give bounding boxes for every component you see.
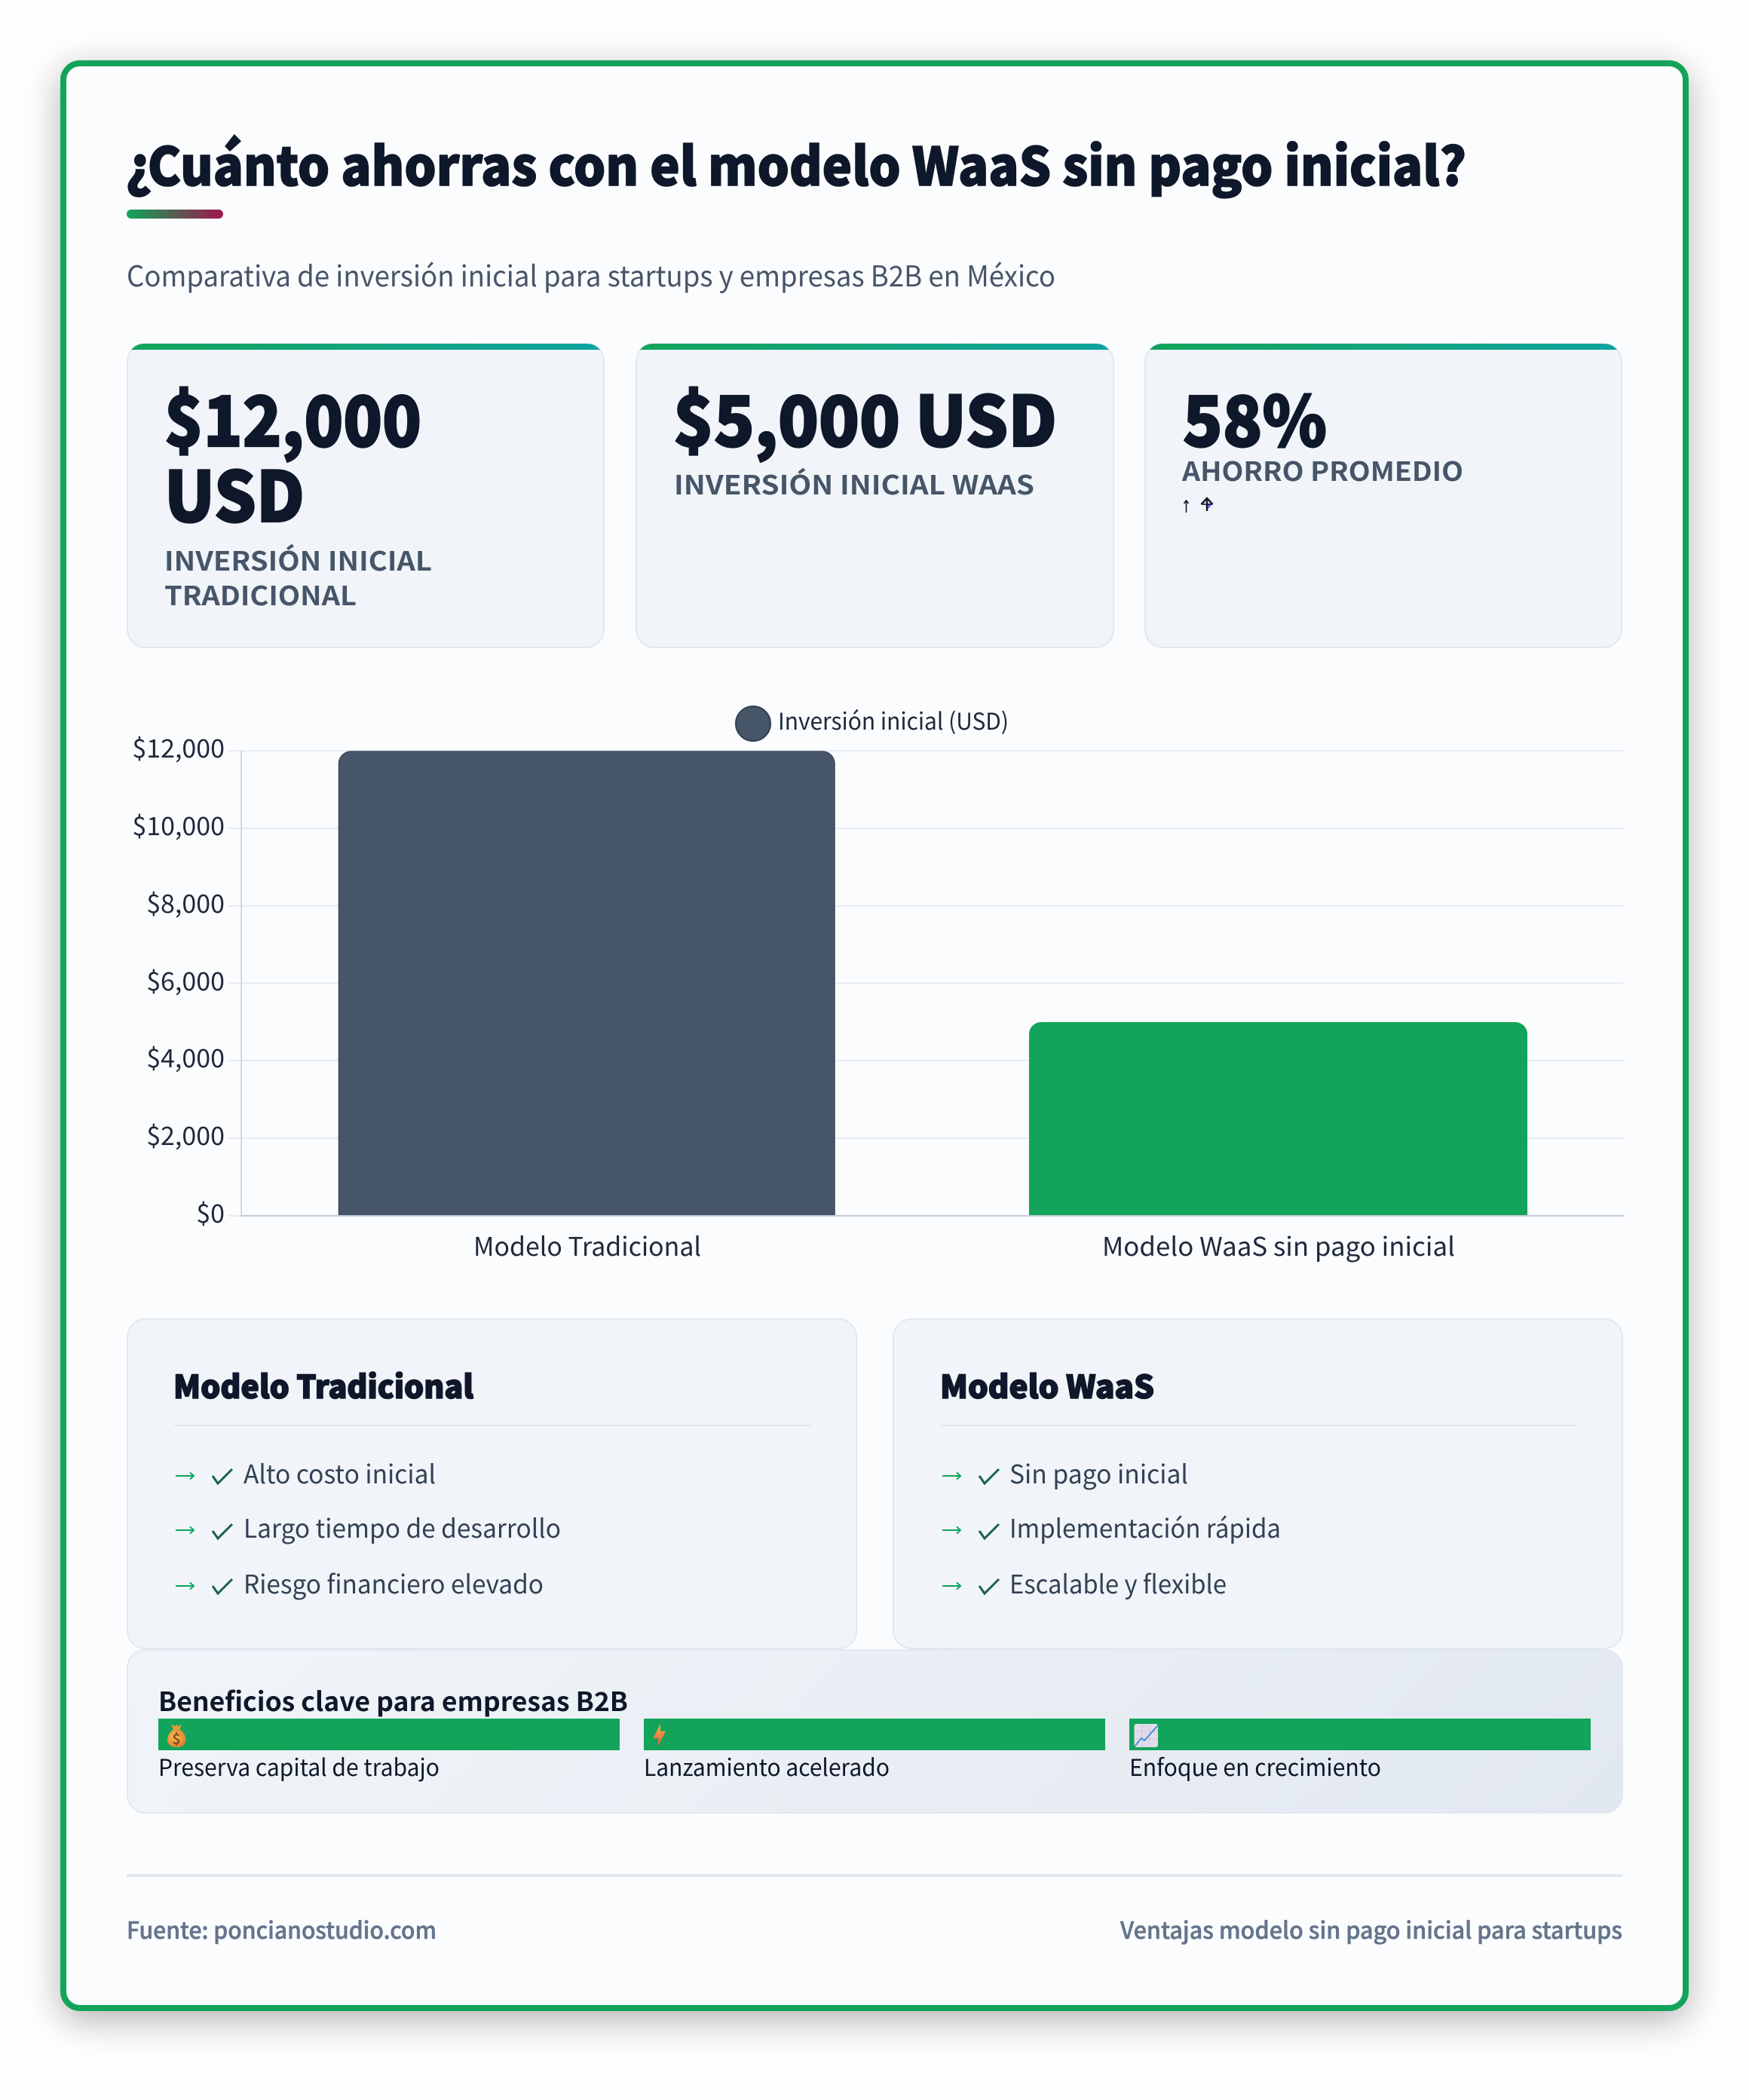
y axis labels: $10,000 bbox=[132, 806, 225, 843]
stat card: average savings: 58% bbox=[1183, 366, 1327, 467]
icon: up arrow bbox=[1184, 501, 1188, 513]
panel: key benefits bbox=[127, 1650, 1622, 1813]
subtitle: Comparativa de inversión inicial para startups y empresas B2B en México bbox=[127, 253, 1055, 295]
list item: Riesgo financiero elevado bbox=[244, 1564, 544, 1601]
benefit: accelerated launch: Lanzamiento acelerado bbox=[644, 1749, 890, 1783]
stat card: traditional investment: USD bbox=[164, 442, 305, 542]
stat card: traditional investment bbox=[127, 344, 604, 647]
icon: diamond up arrow bbox=[1202, 498, 1213, 511]
stat card: average savings: AHORRO PROMEDIO bbox=[1181, 451, 1463, 489]
benefit: growth focus: Enfoque en crecimiento bbox=[1129, 1749, 1381, 1783]
stat card: WaaS investment bbox=[636, 344, 1113, 647]
icon: money bag: $ bbox=[172, 1728, 181, 1749]
stat card: WaaS investment: $5,000 USD bbox=[673, 366, 1057, 467]
benefits heading: Beneficios clave para empresas B2B bbox=[158, 1681, 628, 1719]
x axis labels bbox=[473, 1226, 1455, 1263]
stat card: traditional investment: INVERSIÓN INICIAL bbox=[164, 540, 432, 579]
bar chart: initial investment bbox=[132, 703, 1624, 1263]
list item: Alto costo inicial bbox=[244, 1454, 436, 1491]
title underline bbox=[127, 210, 223, 219]
bar: traditional model bbox=[339, 752, 835, 1215]
stat card: traditional investment: TRADICIONAL bbox=[164, 575, 357, 614]
x axis labels: Modelo Tradicional bbox=[473, 1226, 701, 1263]
panel heading: Modelo WaaS bbox=[940, 1362, 1154, 1408]
y axis labels: $0 bbox=[196, 1193, 225, 1230]
y axis labels: $8,000 bbox=[146, 883, 225, 920]
benefit: growth focus bbox=[1129, 1719, 1591, 1783]
list item: Sin pago inicial bbox=[1009, 1454, 1188, 1491]
y axis labels bbox=[132, 728, 225, 1230]
list item: Escalable y flexible bbox=[1009, 1564, 1227, 1601]
stat card: WaaS investment: INVERSIÓN INICIAL WAAS bbox=[674, 464, 1034, 503]
infographic content bbox=[127, 134, 1624, 1945]
benefit: accelerated launch bbox=[644, 1719, 1105, 1783]
bar: WaaS model bbox=[1029, 1022, 1527, 1215]
benefit: working capital bbox=[158, 1719, 620, 1783]
y axis labels: $12,000 bbox=[132, 728, 225, 765]
y axis labels: $6,000 bbox=[146, 961, 225, 998]
panel heading: Modelo Tradicional bbox=[173, 1362, 473, 1408]
benefit: working capital: Preserva capital de trabajo bbox=[158, 1749, 440, 1783]
icon: lightning bolt bbox=[653, 1724, 666, 1747]
y axis labels: $2,000 bbox=[146, 1116, 225, 1153]
panel: traditional model bbox=[127, 1319, 856, 1648]
icon: money bag bbox=[167, 1725, 185, 1749]
y axis labels: $4,000 bbox=[146, 1038, 225, 1075]
panel: WaaS model bbox=[893, 1319, 1622, 1648]
list item: Largo tiempo de desarrollo bbox=[244, 1508, 561, 1545]
chart legend: Inversión inicial (USD) bbox=[778, 703, 1009, 736]
footer source: Fuente: poncianostudio.com bbox=[127, 1912, 436, 1945]
stat card: average savings bbox=[1145, 344, 1622, 647]
footer note: Ventajas modelo sin pago inicial para startups bbox=[1120, 1912, 1622, 1945]
list item: Implementación rápida bbox=[1009, 1508, 1281, 1545]
icon: growth chart bbox=[1134, 1724, 1158, 1747]
x axis labels: Modelo WaaS sin pago inicial bbox=[1102, 1226, 1455, 1263]
title: ¿Cuánto ahorras con el modelo WaaS sin pago inicial? bbox=[126, 125, 1466, 201]
stat card: traditional investment: $12,000 bbox=[164, 366, 421, 467]
